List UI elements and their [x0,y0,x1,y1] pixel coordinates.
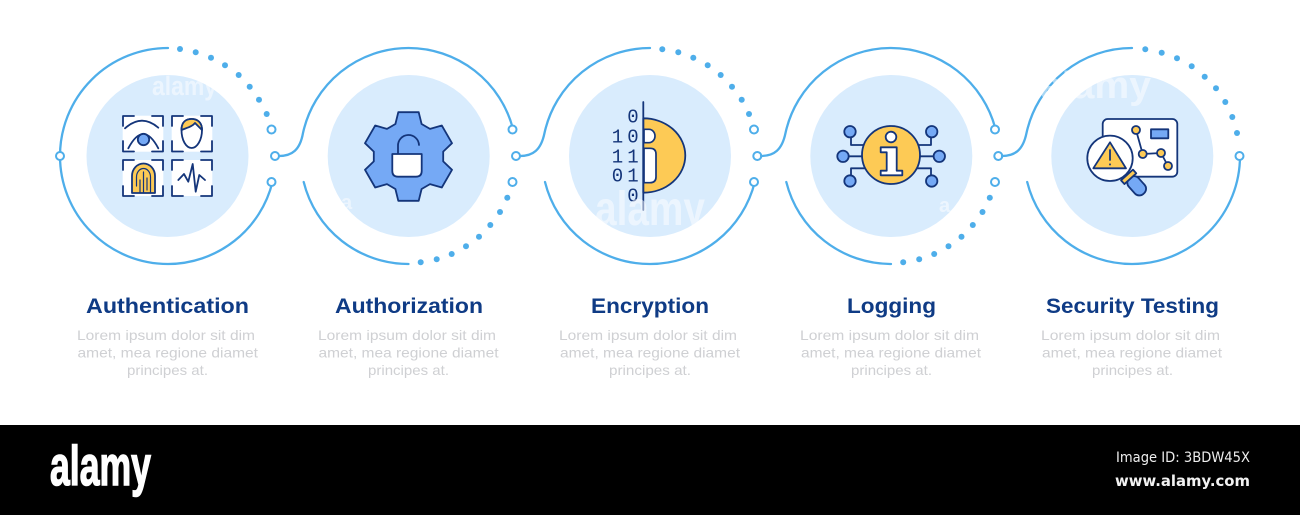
lower arc: encryption [545,182,755,264]
text block: authentication: principes at. [127,362,208,378]
icon: binary coin: 0 [627,106,639,128]
panel: security testing [1002,46,1244,378]
heading: logging: Logging [847,295,936,318]
icon: binary coin [612,102,685,210]
background circle: security testing [1051,75,1213,237]
ring nodes: authorization [508,126,520,186]
background circle: authorization [328,75,490,237]
background circle: logging [810,75,972,237]
background circle: encryption [569,75,731,237]
text block: authorization: Lorem ipsum dolor sit dim [318,327,496,343]
text block: logging [800,327,981,378]
text block: authentication: amet, mea regione diamet [78,344,258,360]
dotted arc: logging [900,195,993,265]
heading: authentication: Authentication [86,295,249,318]
background circle: authentication [86,75,248,237]
website: www.alamy.com [1115,472,1250,490]
text block: authentication: Lorem ipsum dolor sit dim [77,327,255,343]
icon: binary coin: 0 [627,126,639,148]
ring node: security testing [1236,152,1244,160]
panel: encryption [520,46,761,378]
panel: logging [761,48,1002,378]
heading: encryption: Encryption [591,295,709,318]
text block: security testing: principes at. [1092,362,1173,378]
watermark fragment: alamy [1040,65,1151,107]
text block: encryption: principes at. [609,362,691,378]
lower arc: security testing [1027,156,1240,264]
heading: authorization: Authorization [335,295,483,318]
text block: authorization [318,327,499,378]
ring: authentication [60,48,272,264]
lower arc: logging [786,182,891,264]
ring: authorization [279,48,513,156]
logo: alamy: alamy [50,434,151,497]
text block: logging: amet, mea regione diamet [801,344,981,360]
watermark: alamy [595,183,705,236]
icon: binary coin: 0 [612,166,623,188]
ring: logging [761,48,996,156]
text block: logging: Lorem ipsum dolor sit dim [800,327,979,343]
panel: authentication [56,46,279,378]
icon: gear with open lock [365,112,452,201]
text block: logging: principes at. [851,362,932,378]
icon: magnifier over warning and dashboard [1087,119,1177,199]
dotted arc: encryption [659,46,752,117]
ring nodes: authentication [56,126,279,186]
dotted arc: security testing [1142,46,1240,136]
text block: encryption: Lorem ipsum dolor sit dim [559,327,737,343]
text block: authorization: amet, mea regione diamet [318,344,499,360]
icon: biometric scans [123,116,212,196]
icon: info network [837,126,945,187]
text block: security testing: amet, mea regione diamet [1042,344,1222,360]
ring: encryption [520,48,650,156]
icon: binary coin: 1 [612,126,623,148]
watermark fragment: alamy [152,71,217,101]
icon: binary coin: 1 [627,146,639,168]
heading: security testing: Security Testing [1046,295,1219,318]
dotted arc: authentication [177,46,270,117]
text block: authentication [77,327,258,378]
icon: binary coin: 0 [627,186,639,208]
watermark fragment: a [939,195,951,217]
text block: authorization: principes at. [368,362,449,378]
text block: security testing [1041,327,1222,378]
image id: Image ID: 3BDW45X [1116,450,1250,466]
text block: encryption: amet, mea regione diamet [560,344,740,360]
ring: security testing [1002,48,1132,156]
lower arc: authorization [304,182,408,264]
watermark fragment: a [341,192,353,214]
text block: encryption [559,327,740,378]
text block: security testing: Lorem ipsum dolor sit dim [1041,327,1220,343]
ring nodes: logging [991,126,1002,186]
footer band [0,425,1300,515]
icon: binary coin: 1 [612,146,623,168]
panel: authorization [279,48,520,378]
dotted arc: authorization [418,195,510,265]
icon: binary coin: 1 [627,166,639,188]
ring nodes: encryption [750,126,761,186]
